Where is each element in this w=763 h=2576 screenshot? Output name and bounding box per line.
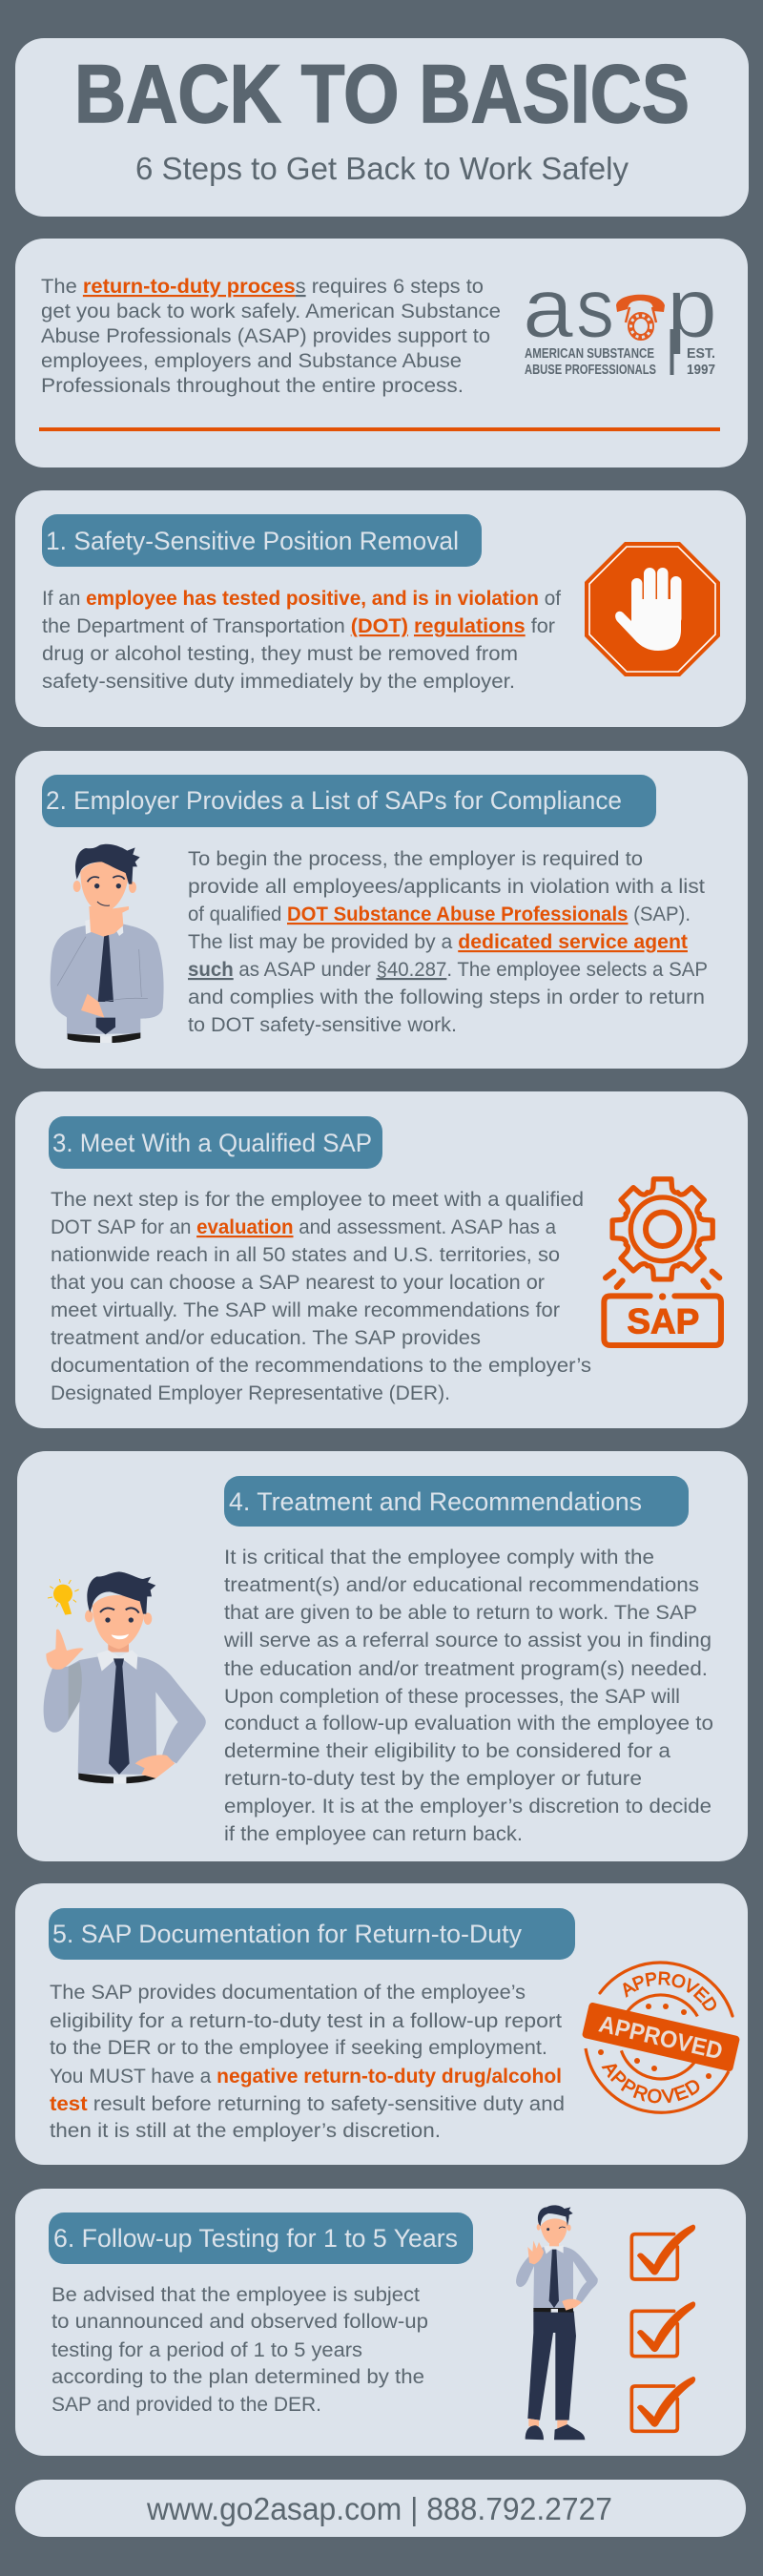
text: step 1: the Department of Transportation (DOT) regulations for: [42, 614, 555, 637]
intro text: get you back to work safely. American Substance: [41, 300, 501, 322]
heading: step 5: 5. SAP Documentation for Return-to-Duty: [52, 1920, 522, 1948]
heading: step 3: 3. Meet With a Qualified SAP: [52, 1129, 372, 1157]
text: step 1: If an employee has tested positive, and is in violation of: [42, 587, 561, 610]
text: step 4: Upon completion of these processes, the SAP will: [224, 1685, 680, 1708]
text: step 4: will serve as a referral source to assist you in finding: [223, 1629, 711, 1652]
text: step 3: nationwide reach in all 50 states and U.S. territories, so: [51, 1243, 560, 1266]
panel: step 5: [15, 1883, 748, 2165]
text: step 1: safety-sensitive duty immediately by the employer.: [42, 670, 515, 693]
panel: introduction: [15, 239, 748, 467]
logo: ASAP: EST.: [687, 346, 715, 362]
heading: step 5: [49, 1908, 575, 1960]
heading: step 6: 6. Follow-up Testing for 1 to 5 Years: [53, 2224, 458, 2253]
text: step 4: the education and/or treatment program(s) needed.: [224, 1657, 708, 1680]
text: step 3: documentation of the recommendations to the employer’s: [51, 1354, 591, 1377]
text: step 5: You MUST have a negative return-to-duty drug/alcohol: [50, 2065, 562, 2088]
text: step 4: treatment(s) and/or educational recommendations: [224, 1573, 699, 1596]
text: step 5: test result before returning to safety-sensitive duty and: [50, 2092, 565, 2115]
checkbox 1: [631, 2225, 695, 2279]
text: step 3: treatment and/or education. The SAP provides: [51, 1326, 481, 1349]
logo: ASAP: s: [576, 260, 614, 355]
text: step 6: to unannounced and observed follow-up: [52, 2310, 428, 2333]
subtitle: 6 Steps to Get Back to Work Safely: [135, 151, 629, 186]
text: step 2: of qualified DOT Substance Abuse Professionals (SAP).: [188, 903, 691, 925]
text: step 2: [188, 847, 708, 1036]
heading: step 3: [49, 1116, 382, 1169]
icon: SAP gear: [604, 1179, 721, 1345]
intro text: Professionals throughout the entire process.: [41, 374, 464, 397]
illustration: standing man giving OK sign: [516, 2205, 598, 2440]
text: step 5: The SAP provides documentation of the employee’s: [50, 1981, 526, 2004]
logo: ASAP: a: [523, 260, 573, 355]
heading: step 2: 2. Employer Provides a List of SAPs for Compliance: [46, 786, 622, 815]
text: step 5: eligibility for a return-to-duty test in a follow-up report: [50, 2009, 562, 2032]
text: step 6: testing for a period of 1 to 5 years: [52, 2338, 362, 2361]
footer: website and phone: [15, 2480, 746, 2537]
panel: step 3: [15, 1091, 748, 1428]
panel: header: [15, 38, 749, 217]
text: step 2: To begin the process, the employer is required to: [188, 847, 643, 870]
text: step 6: SAP and provided to the DER.: [52, 2393, 321, 2416]
icon: approved stamp: APPROVED: [601, 2064, 700, 2103]
title: BACK TO BASICS: [74, 49, 690, 140]
text: step 6: Be advised that the employee is subject: [52, 2283, 420, 2306]
text: step 3: [51, 1188, 591, 1404]
logo: ASAP: AMERICAN SUBSTANCE: [525, 346, 654, 362]
text: step 4: return-to-duty test by the employer or future: [224, 1767, 642, 1790]
panel: step 1: [15, 490, 746, 727]
text: step 4: that are given to be able to return to work. The SAP: [224, 1601, 697, 1624]
text: step 6: according to the plan determined by the: [52, 2365, 424, 2388]
checkbox 2: [631, 2301, 695, 2357]
text: step 2: provide all employees/applicants in violation with a list: [188, 875, 705, 898]
intro text: [41, 275, 501, 397]
panel: step 2: [15, 751, 748, 1069]
logo: ASAP: ABUSE PROFESSIONALS: [525, 363, 656, 378]
illustration: thinking man: [51, 844, 164, 1043]
text: step 1: drug or alcohol testing, they must be removed from: [42, 642, 518, 665]
intro text: The return-to-duty process requires 6 steps to: [41, 275, 484, 298]
illustration: man with light bulb idea: [44, 1571, 206, 1783]
footer: website and phone: www.go2asap.com | 888.792.2727: [146, 2491, 612, 2526]
text: step 3: DOT SAP for an evaluation and assessment. ASAP has a: [51, 1215, 556, 1238]
intro text: employees, employers and Substance Abuse: [41, 349, 462, 372]
text: step 5: to the DER or to the employee if seeking employment.: [50, 2036, 547, 2059]
text: step 3: The next step is for the employee to meet with a qualified: [51, 1188, 584, 1211]
text: step 4: determine their eligibility to be considered for a: [224, 1739, 670, 1762]
heading: step 4: 4. Treatment and Recommendations: [229, 1487, 642, 1516]
heading: step 4: [224, 1476, 689, 1527]
icon: checkbox list: [631, 2225, 695, 2431]
icon: SAP gear: SAP: [627, 1301, 699, 1340]
text: step 2: and complies with the following steps in order to return: [188, 986, 705, 1008]
icon: approved stamp: APPROVED: [623, 1971, 716, 2011]
intro text: Abuse Professionals (ASAP) provides support to: [41, 324, 490, 347]
text: step 4: if the employee can return back.: [224, 1822, 523, 1845]
logo: ASAP: [523, 260, 717, 378]
text: step 5: [50, 1981, 565, 2142]
heading: step 2: [42, 775, 656, 827]
logo: ASAP: p: [667, 260, 717, 355]
text: step 6: [52, 2283, 428, 2416]
text: step 3: Designated Employer Representative (DER).: [51, 1381, 450, 1404]
text: step 3: meet virtually. The SAP will make recommendations for: [51, 1298, 560, 1321]
text: step 2: such as ASAP under §40.287. The employee selects a SAP: [188, 958, 708, 981]
panel: step 6: [15, 2189, 746, 2456]
text: step 2: The list may be provided by a dedicated service agent: [188, 930, 688, 953]
heading: step 1: 1. Safety-Sensitive Position Removal: [46, 527, 459, 555]
text: step 4: [223, 1546, 713, 1845]
text: step 5: then it is still at the employer’s discretion.: [50, 2119, 441, 2142]
panel: step 4: [17, 1451, 748, 1861]
heading: step 1: [42, 514, 482, 567]
icon: stop hand sign: [585, 542, 720, 676]
text: step 3: that you can choose a SAP nearest to your location or: [51, 1271, 545, 1294]
checkbox 3: [631, 2377, 695, 2431]
icon: approved stamp: [582, 1961, 740, 2114]
text: step 4: employer. It is at the employer’s discretion to decide: [224, 1795, 711, 1818]
heading: step 6: [49, 2212, 473, 2264]
icon: approved stamp: APPROVED: [596, 2010, 725, 2065]
logo: ASAP: 1997: [687, 363, 715, 378]
text: step 4: conduct a follow-up evaluation with the employee to: [224, 1712, 713, 1735]
text: step 2: to DOT safety-sensitive work.: [188, 1013, 457, 1036]
text: step 1: [42, 587, 561, 693]
text: step 4: It is critical that the employee comply with the: [224, 1546, 654, 1568]
